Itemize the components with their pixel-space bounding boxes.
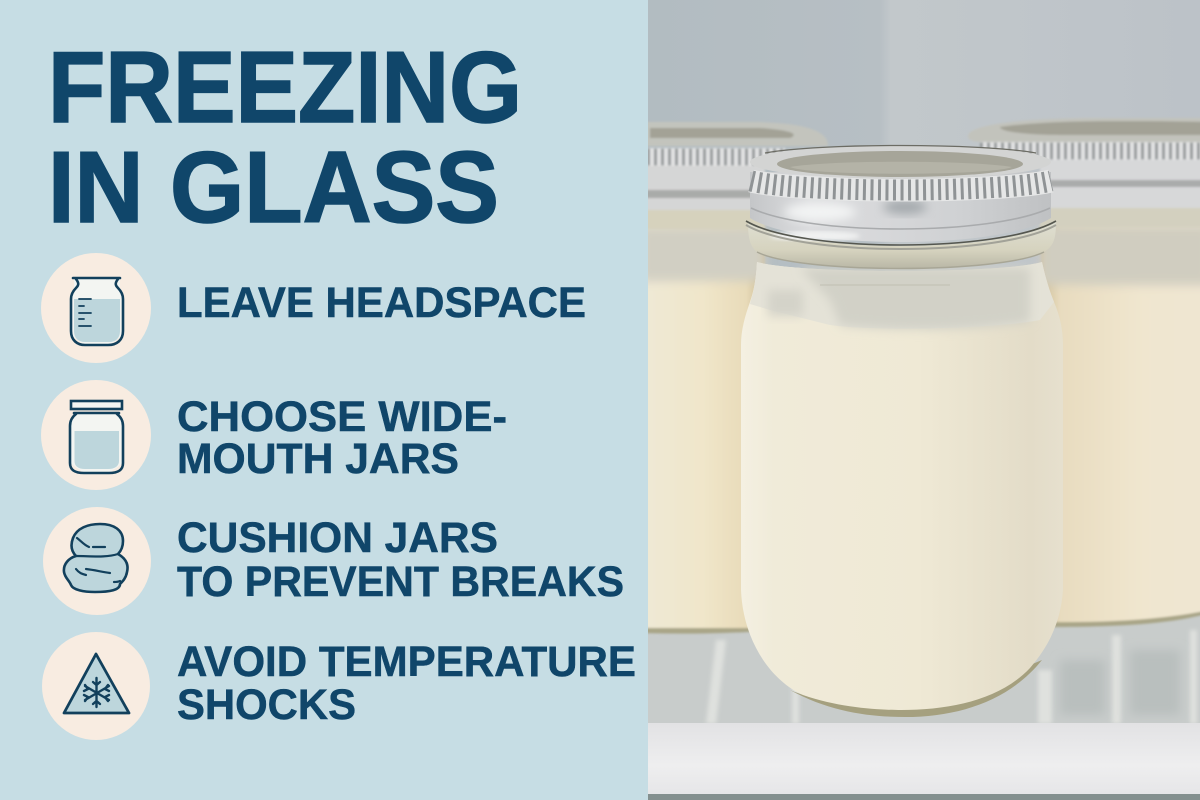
tip: leave headspace <box>41 253 586 363</box>
icon: snowflake warning triangle <box>42 632 150 740</box>
tip: avoid temperature shocks <box>42 632 636 740</box>
freezer wall <box>648 0 1200 640</box>
label: SHOCKS <box>177 681 356 729</box>
label: CUSHION JARS <box>177 514 498 562</box>
back right jar <box>968 118 1200 627</box>
label: TO PREVENT BREAKS <box>177 558 624 606</box>
front jar <box>741 145 1063 717</box>
icon: wide-mouth jar <box>41 380 151 490</box>
back left jar <box>640 122 828 634</box>
left panel background <box>0 0 648 800</box>
jar body <box>741 262 1063 710</box>
shelf rail <box>648 723 1200 800</box>
jar glass rim <box>748 222 1056 268</box>
shelf liner <box>648 615 1200 724</box>
lid ring seal <box>746 221 1056 245</box>
label <box>177 638 636 729</box>
frost band at jar shoulder <box>750 262 1054 329</box>
icon: jar with measuring marks <box>41 253 151 363</box>
label <box>177 514 624 606</box>
title: IN GLASS <box>48 132 499 244</box>
lid top <box>750 145 1051 179</box>
label: LEAVE HEADSPACE <box>177 279 586 327</box>
title: FREEZING <box>48 32 522 144</box>
photo: jars on freezer shelf <box>640 0 1200 800</box>
lid band <box>750 172 1051 242</box>
lid ribs <box>751 181 1051 190</box>
label: AVOID TEMPERATURE <box>177 638 636 686</box>
label <box>177 393 507 483</box>
title <box>48 32 522 244</box>
icon: cushion wrap <box>43 507 151 615</box>
label: MOUTH JARS <box>177 435 459 483</box>
tip: cushion jars <box>43 507 624 615</box>
label: CHOOSE WIDE- <box>177 393 507 441</box>
tip: choose wide-mouth jars <box>41 380 507 490</box>
jar base ring <box>790 660 1042 717</box>
